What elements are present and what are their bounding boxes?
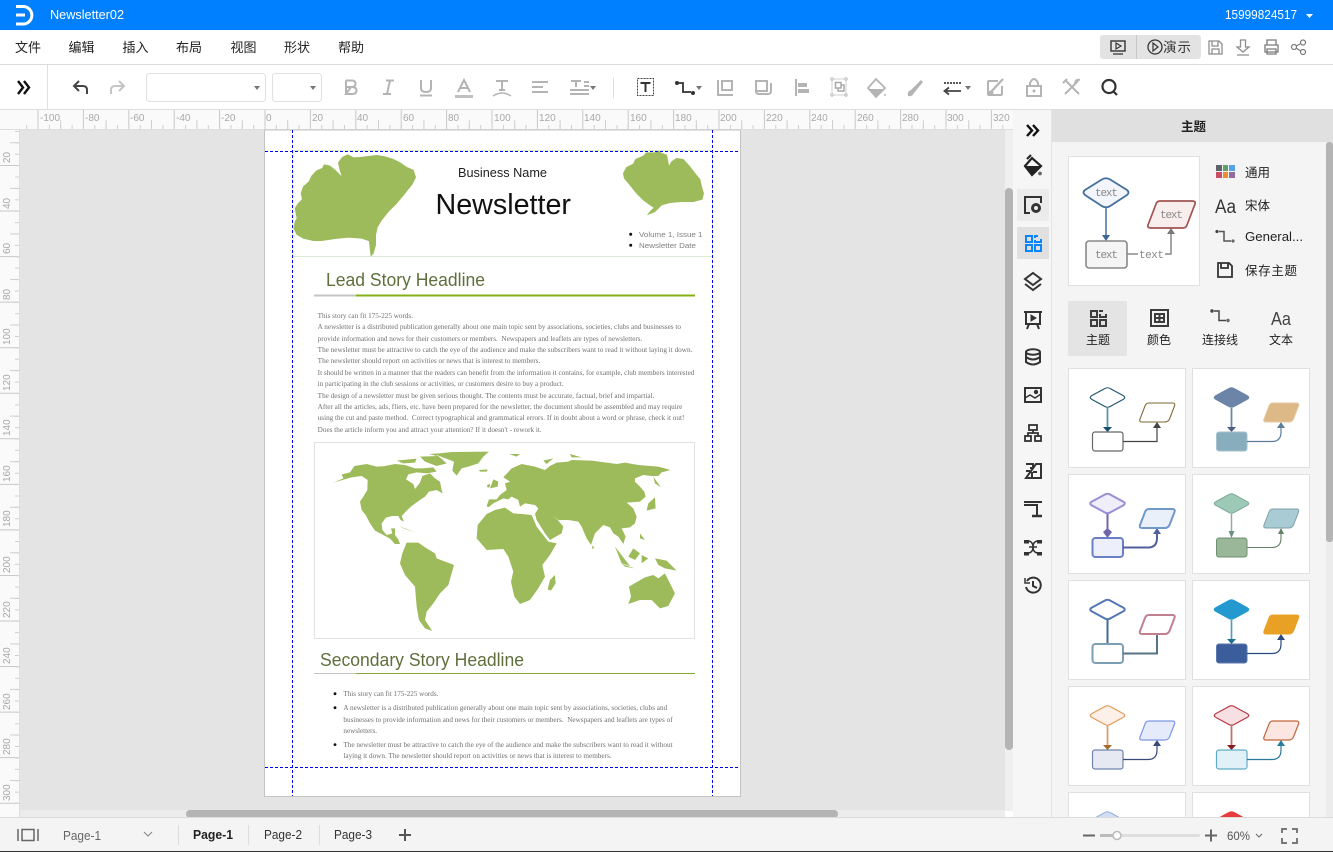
lead story text: provide information and news for their customers or members. Newspapers and leaflets are types of newsletters.: [318, 335, 643, 343]
theme tabs: [1068, 301, 1293, 356]
north america: [333, 464, 443, 544]
horizontal ruler labels: 280: [902, 113, 919, 124]
horizontal ruler labels: 320: [993, 113, 1010, 124]
newsletter title: Newsletter: [436, 189, 571, 221]
secondary story headline: Secondary Story Headline: [320, 649, 524, 670]
icon: connector: [675, 81, 702, 95]
icon: expand: [18, 81, 29, 94]
page tabs: Page-2: [264, 827, 302, 842]
horizontal ruler labels: 200: [720, 113, 737, 124]
horizontal ruler labels: 260: [857, 113, 874, 124]
icon: save: [1209, 41, 1222, 54]
horizontal ruler labels: 180: [675, 113, 692, 124]
issue bullets: [629, 230, 702, 250]
theme card 10, clipped: [1192, 792, 1310, 832]
south america: [400, 543, 454, 631]
theme card 1: [1068, 368, 1186, 468]
page margin guides: [265, 130, 740, 796]
vertical ruler labels: 200: [2, 556, 13, 573]
vertical ruler labels: 60: [2, 242, 13, 254]
theme card 9, clipped: [1068, 792, 1186, 832]
vertical ruler labels: 160: [2, 465, 13, 482]
horizontal ruler labels: -100: [40, 113, 60, 124]
lead story text: using the cut and paste method. Correct typographical and grammatical errors. If in doubt about a word or phrase, check it out!: [318, 414, 684, 422]
theme card 8: [1192, 686, 1310, 786]
theme options list: Aa: [1215, 197, 1236, 218]
horizontal ruler labels: -60: [130, 113, 145, 124]
eurasia: [487, 460, 671, 545]
current theme preview: text: [1095, 188, 1118, 200]
theme panel: [1052, 110, 1333, 832]
icon: print: [1265, 40, 1278, 54]
icon: redo: [111, 81, 124, 94]
theme tabs: 主题: [1086, 333, 1110, 347]
lead story text: The design of a newsletter must be given serious thought. The contents must be accurate, factual, brief and impartial.: [318, 392, 655, 400]
icon: account dropdown: [1306, 14, 1313, 18]
menu labels: 布局: [176, 40, 202, 55]
lead story text: in participating in the club sessions or activities, or customers desire to buy a product.: [318, 380, 564, 388]
horizontal ruler labels: 220: [766, 113, 783, 124]
horizontal ruler labels: 20: [312, 113, 324, 124]
vertical ruler labels: 280: [2, 738, 13, 755]
page selector: [63, 828, 152, 843]
arrange icons: [718, 78, 1080, 97]
icon: color tab: [1151, 310, 1168, 326]
zoom level: [1227, 829, 1262, 843]
vertical ruler labels: 260: [2, 693, 13, 710]
current theme preview: text: [1095, 250, 1118, 262]
theme card 2: [1192, 368, 1310, 468]
theme tabs: 连接线: [1202, 332, 1238, 347]
menu labels: 插入: [122, 40, 148, 55]
vertical ruler labels: 140: [2, 419, 13, 436]
greenland: [433, 452, 489, 476]
lead story text: Does the article inform you and attract your attention? If it doesn't - rework it.: [318, 426, 542, 434]
current theme preview: [1068, 156, 1200, 286]
icon: presentation: [1024, 312, 1042, 329]
secondary story bullets: The newsletter must be attractive to catch the eye of the audience and make the subscribers want to read it without: [343, 741, 673, 749]
theme options list: 保存主题: [1245, 264, 1297, 278]
icon: gantt: [1024, 502, 1042, 516]
icon: large ginkgo leaf: [294, 155, 416, 256]
icon: text box: [638, 78, 654, 96]
theme options list: 通用: [1245, 166, 1270, 180]
font family select: [146, 74, 266, 102]
zoom slider: [1083, 830, 1217, 842]
icon: download: [1237, 40, 1249, 55]
lead story text: The newsletter should report on activities or news that is interest to members.: [318, 357, 541, 365]
horizontal ruler labels: 100: [494, 113, 511, 124]
theme card 3: [1068, 474, 1186, 574]
secondary story bullets: businesses to provide information and news for their customers or members. Newspapers and leaflets are types of: [343, 716, 673, 724]
page selector: Page-1: [63, 828, 101, 843]
menu labels: 视图: [230, 40, 256, 55]
menu labels: 形状: [284, 40, 310, 55]
issue bullets: Newsletter Date: [639, 241, 696, 250]
page tabs: Page-3: [334, 827, 372, 842]
lead story text: [318, 312, 695, 434]
vertical ruler: [0, 130, 20, 818]
lead story text: It should be written in a manner that the readers can benefit from the information it contains, for example, club members interested: [318, 369, 695, 377]
vertical ruler labels: 300: [2, 784, 13, 801]
lead story text: This story can fit 175-225 words.: [318, 312, 413, 320]
business name: Business Name: [458, 165, 547, 180]
horizontal ruler labels: 60: [403, 113, 415, 124]
user account: 15999824517: [1225, 7, 1297, 22]
horizontal ruler labels: -40: [176, 113, 191, 124]
newsletter page: [264, 130, 740, 796]
lead story text: The newsletter must be attractive to catch the eye of the audience and make the subscribers want to read it without laying it down.: [318, 346, 693, 354]
secondary story bullets: This story can fit 175-225 words.: [343, 690, 439, 698]
menu labels: 文件: [15, 40, 41, 55]
page tabs: [178, 825, 372, 845]
world map: [314, 442, 694, 638]
southeast asia islands: [592, 533, 677, 571]
icon: small ginkgo leaf: [623, 151, 704, 215]
side icon column: [1013, 110, 1052, 818]
vertical ruler labels: 240: [2, 647, 13, 664]
panel header: [1052, 110, 1333, 142]
icon: page setup: [1017, 189, 1049, 221]
horizontal ruler labels: -20: [221, 113, 236, 124]
theme card 7: [1068, 686, 1186, 786]
horizontal ruler labels: 80: [448, 113, 460, 124]
theme card 6: [1192, 580, 1310, 680]
lead story headline: Lead Story Headline: [326, 270, 485, 290]
vertical ruler labels: 20: [2, 151, 13, 163]
secondary story bullets: laying it down. The newsletter should report on activities or news that is interest to members.: [343, 752, 612, 760]
presentation button group: 演示: [1163, 40, 1191, 55]
title bar: [0, 0, 1333, 30]
icon: save theme: [1218, 263, 1232, 277]
vertical ruler labels: 220: [2, 601, 13, 618]
menu bar: [0, 30, 1333, 65]
secondary story bullets: [334, 690, 673, 760]
icon: general palette: [1216, 165, 1235, 178]
lead story text: A newsletter is a distributed publication generally about one main topic sent by associations, societies, clubs and businesses to: [318, 323, 682, 331]
issue bullets: Volume 1, Issue 1: [639, 230, 702, 239]
document name: Newsletter02: [50, 7, 124, 22]
icon: history: [1025, 578, 1041, 593]
horizontal ruler labels: 40: [357, 113, 369, 124]
uk, japan and far east: [487, 454, 661, 511]
icon: layers: [1025, 273, 1041, 290]
icon: floor plan: [1026, 464, 1041, 478]
horizontal ruler labels: 120: [539, 113, 556, 124]
current theme preview: text: [1160, 210, 1183, 222]
icon: org chart: [1025, 425, 1041, 441]
icon: share: [1292, 40, 1306, 54]
text style icons: [346, 80, 596, 98]
theme card 5: [1068, 580, 1186, 680]
vertical ruler labels: [2, 151, 13, 801]
formatting toolbar: [0, 65, 1333, 110]
horizontal ruler labels: 160: [630, 113, 647, 124]
horizontal ruler labels: [40, 113, 1010, 124]
theme tabs: 文本: [1269, 332, 1293, 347]
vertical ruler labels: 80: [2, 288, 13, 300]
header box: [293, 150, 712, 256]
panel header: 主题: [1181, 119, 1206, 134]
icon: page list: [18, 829, 38, 841]
vertical ruler labels: 120: [2, 374, 13, 391]
horizontal ruler labels: 140: [584, 113, 601, 124]
zoom level: 60%: [1227, 829, 1250, 843]
menu labels: 编辑: [68, 40, 94, 55]
lead story text: After all the articles, ads, fliers, etc. have been prepared for the newsletter, the document should be assembled and may require: [318, 403, 682, 411]
icon: search: [1102, 80, 1117, 95]
africa: [477, 508, 557, 604]
font size select: [272, 74, 322, 102]
icon: theme tab: [1091, 311, 1106, 326]
icon: connector tab: [1210, 309, 1230, 322]
menu labels: 帮助: [338, 40, 364, 55]
menu labels: [15, 40, 364, 55]
arctic islands: [397, 453, 447, 466]
icon: data: [1026, 349, 1040, 364]
icon: fullscreen: [1282, 829, 1297, 843]
icon: theme, selected: [1017, 227, 1049, 259]
vertical ruler labels: 180: [2, 510, 13, 527]
canvas scrollbars: [20, 130, 1013, 818]
vertical ruler labels: 40: [2, 197, 13, 209]
icon: general connector: [1215, 230, 1235, 243]
horizontal ruler: [0, 110, 1013, 130]
icon: undo: [74, 81, 87, 94]
horizontal ruler labels: 0: [266, 113, 272, 124]
iceland, svalbard and caribbean: [398, 454, 520, 532]
theme tabs: 颜色: [1147, 332, 1171, 347]
icon: app logo: [16, 6, 32, 24]
madagascar: [548, 575, 556, 591]
icon: fill: [1024, 155, 1042, 176]
horizontal ruler labels: -80: [85, 113, 100, 124]
theme card 4: [1192, 474, 1310, 574]
page tabs: Page-1: [193, 827, 233, 842]
australia: [628, 573, 675, 608]
icon: add page: [399, 829, 411, 841]
secondary story bullets: newsletters.: [343, 727, 377, 735]
icon: mind map: [1024, 540, 1042, 556]
theme tabs: Aa: [1271, 309, 1292, 329]
horizontal ruler labels: 240: [811, 113, 828, 124]
icon: collapse panel: [1027, 125, 1038, 136]
current theme preview: text: [1139, 250, 1164, 262]
bottom status bar: [0, 817, 1333, 852]
theme options list: [1215, 165, 1303, 278]
theme options list: General...: [1245, 230, 1303, 244]
canvas background: [20, 130, 1005, 811]
presentation button group: [1100, 35, 1201, 59]
panel scrollbar: [1326, 142, 1333, 818]
vertical ruler labels: 100: [2, 328, 13, 345]
horizontal ruler labels: 300: [947, 113, 964, 124]
icon: image: [1025, 388, 1041, 402]
secondary story bullets: A newsletter is a distributed publication generally about one main topic sent by associations, societies, clubs and: [343, 704, 668, 712]
theme options list: 宋体: [1245, 198, 1270, 213]
